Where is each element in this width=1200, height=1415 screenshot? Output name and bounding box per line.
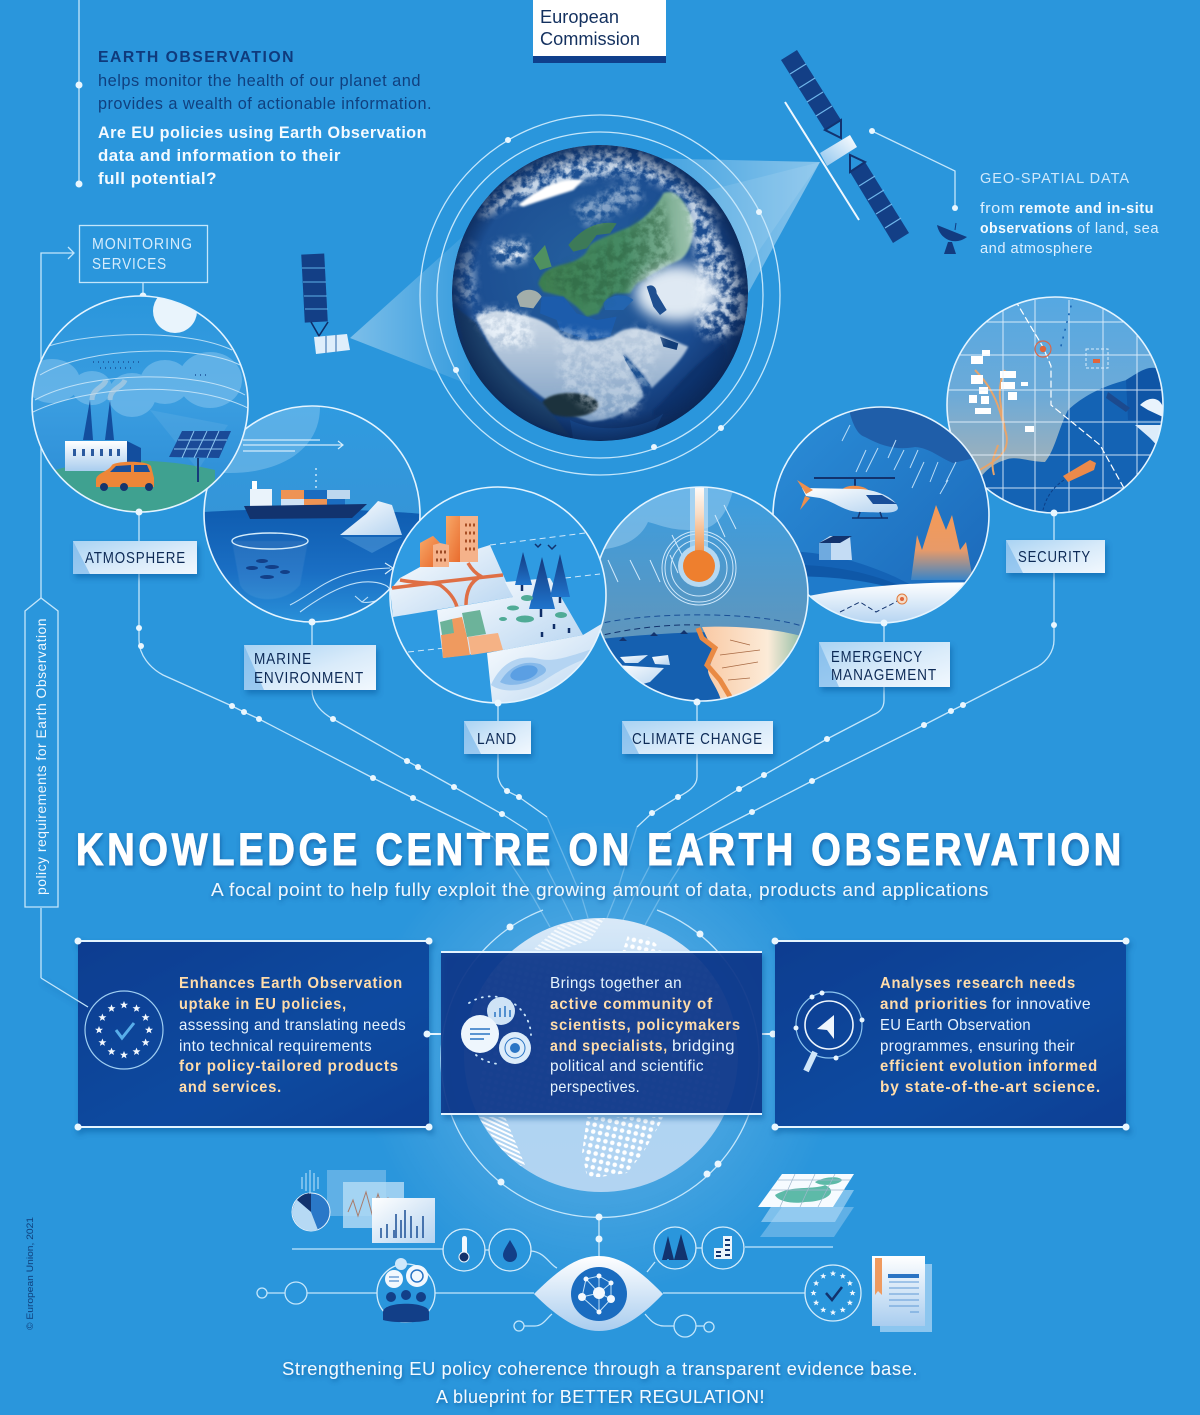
hills bbox=[800, 552, 908, 584]
label: security bbox=[1006, 540, 1105, 573]
panel: uptake in EU policies: into technical requirements bbox=[179, 1038, 372, 1055]
Indian Ocean bbox=[654, 346, 722, 412]
South Atlantic dark limb bbox=[456, 309, 556, 423]
Earth globe bbox=[452, 145, 750, 441]
satellite beam right bbox=[640, 158, 820, 317]
trees bbox=[522, 585, 569, 637]
panel: research needs: by state-of-the-art science. bbox=[880, 1079, 1101, 1096]
panel: active community: scientists, policymakers bbox=[550, 1017, 741, 1034]
icon: satellite dish bbox=[937, 223, 967, 254]
intro text block: provides a wealth of actionable information. bbox=[98, 94, 432, 113]
orange ship bbox=[1063, 460, 1096, 482]
currents bbox=[290, 568, 390, 612]
storm cloud bbox=[850, 408, 972, 463]
label: land: LAND bbox=[477, 731, 517, 748]
intro text block bbox=[76, 0, 432, 188]
bottom globe glow bbox=[360, 818, 840, 1298]
thermometer bbox=[690, 484, 708, 554]
ground bbox=[56, 460, 215, 512]
label: emergency management bbox=[819, 642, 950, 687]
tile: city bbox=[390, 545, 513, 617]
buildings bbox=[969, 350, 1034, 432]
label: land bbox=[464, 721, 531, 754]
intro text block: Are EU policies using Earth Observation bbox=[98, 123, 427, 142]
label: marine environment: MARINE bbox=[254, 651, 312, 668]
label: emergency management: MANAGEMENT bbox=[831, 667, 937, 684]
tile: fields bbox=[437, 578, 583, 658]
label: emergency management: EMERGENCY bbox=[831, 649, 923, 666]
dashed contour bbox=[408, 533, 600, 652]
European Commission logo: Commission bbox=[540, 29, 640, 49]
copyright: © European Union, 2021 bbox=[25, 1217, 35, 1330]
sea bbox=[590, 632, 760, 710]
geo-spatial data: and atmosphere bbox=[980, 240, 1093, 257]
panel: active community: bridging bbox=[672, 1038, 735, 1055]
icon: magnifier compass bbox=[794, 990, 864, 1071]
monitoring services box: MONITORING bbox=[92, 236, 193, 253]
policy requirements arrow bbox=[25, 247, 74, 978]
sea bbox=[982, 380, 1162, 512]
geo-spatial data: of land, sea bbox=[1077, 220, 1159, 237]
intro text block: helps monitor the health of our planet and bbox=[98, 71, 421, 90]
geo-spatial data: observations bbox=[980, 220, 1073, 237]
panel: research needs: EU Earth Observation bbox=[880, 1017, 1031, 1034]
European Commission logo bbox=[533, 0, 666, 63]
roads bbox=[970, 370, 1007, 475]
mountains bbox=[911, 505, 973, 580]
panel: active community: perspectives. bbox=[550, 1079, 640, 1096]
panel: uptake in EU policies: Enhances Earth Observation bbox=[179, 975, 403, 992]
bright cloud streak bbox=[518, 179, 583, 207]
Central Asia haze bbox=[635, 265, 718, 322]
pie chart bbox=[292, 1193, 330, 1231]
coast land bbox=[702, 627, 812, 715]
bottom network lines bbox=[257, 1214, 833, 1337]
intro text block: EARTH OBSERVATION bbox=[98, 49, 295, 66]
Europe and Asia landmass bbox=[538, 192, 694, 317]
label: marine environment: ENVIRONMENT bbox=[254, 670, 364, 687]
policy requirements arrow: policy requirements for Earth Observation bbox=[33, 618, 49, 895]
satellite top right bbox=[781, 50, 909, 243]
satellite left bbox=[301, 253, 350, 354]
panel: land bbox=[390, 487, 612, 710]
label: climate change bbox=[622, 721, 773, 754]
icon: thermometer bbox=[443, 1229, 485, 1271]
helicopter bbox=[797, 478, 898, 518]
tile: water bbox=[487, 623, 612, 710]
European Commission logo: European bbox=[540, 7, 619, 27]
house bbox=[819, 536, 852, 560]
solar panel bbox=[150, 410, 228, 470]
buildings bbox=[446, 516, 462, 562]
icon: EU stars check bbox=[85, 991, 163, 1069]
satellite beam left bbox=[350, 230, 470, 385]
panel: research needs: for innovative bbox=[992, 996, 1091, 1013]
icon: document bbox=[872, 1256, 932, 1332]
icon: EU stars small bbox=[805, 1265, 861, 1321]
monitoring services box bbox=[80, 226, 208, 282]
panel: active community bbox=[441, 952, 762, 1114]
box connectors bbox=[424, 1030, 776, 1038]
panel: uptake in EU policies bbox=[41, 938, 432, 1130]
factory bbox=[83, 400, 93, 440]
rain bbox=[608, 505, 736, 582]
intro text block: full potential? bbox=[98, 169, 217, 188]
label: security: SECURITY bbox=[1018, 549, 1091, 566]
panel: research needs: programmes, ensuring their bbox=[880, 1038, 1075, 1055]
panel: active community: political and scientific bbox=[550, 1058, 704, 1075]
Central Africa forest bbox=[542, 393, 598, 417]
label: atmosphere bbox=[73, 541, 197, 574]
label: atmosphere: ATMOSPHERE bbox=[85, 550, 186, 567]
subtitle: A focal point to help fully exploit the growing amount of data, products and applications bbox=[211, 880, 989, 900]
icon: trees bbox=[654, 1227, 696, 1269]
iceberg bbox=[340, 501, 402, 535]
car bbox=[96, 462, 154, 487]
intro text block: data and information to their bbox=[98, 146, 341, 165]
geo-spatial data bbox=[869, 128, 1159, 257]
label: marine environment bbox=[244, 645, 376, 690]
label: climate change: CLIMATE CHANGE bbox=[632, 731, 763, 748]
panel: uptake in EU policies: uptake in EU policies, bbox=[179, 996, 347, 1013]
panel: climate change bbox=[590, 482, 812, 715]
snowy foreground bbox=[790, 582, 995, 630]
panel: research needs: efficient evolution informed bbox=[880, 1058, 1098, 1075]
icon: buildings bbox=[702, 1227, 744, 1269]
cloud bbox=[590, 482, 735, 550]
panel: active community: and specialists, bbox=[550, 1038, 668, 1055]
monitoring services box: SERVICES bbox=[92, 256, 167, 273]
panel: active community: Brings together an bbox=[550, 975, 682, 992]
closing statement bbox=[282, 1359, 918, 1407]
panel: uptake in EU policies: assessing and translating needs bbox=[179, 1017, 406, 1034]
bottom dotted globe bbox=[441, 910, 759, 1217]
Africa and Arabia bbox=[477, 311, 688, 422]
icon: community bbox=[377, 1258, 435, 1322]
Seas bbox=[540, 297, 617, 340]
Earth orbit rings bbox=[420, 115, 780, 475]
connector lines to knowledge centre bbox=[136, 283, 1057, 927]
panel: research needs: and priorities bbox=[880, 996, 988, 1013]
panel: uptake in EU policies: for policy-tailored products bbox=[179, 1058, 399, 1075]
rain bbox=[842, 425, 956, 494]
geo-spatial data: remote and in-situ bbox=[1019, 200, 1154, 217]
panel: emergency management bbox=[772, 406, 990, 626]
grid bbox=[948, 300, 1162, 515]
dashed border bbox=[1015, 300, 1125, 490]
panel: security bbox=[946, 296, 1164, 516]
panel: active community: active community of bbox=[550, 996, 713, 1013]
panel: uptake in EU policies: and services. bbox=[179, 1079, 282, 1096]
panel: marine environment bbox=[204, 406, 422, 626]
panel: atmosphere bbox=[24, 289, 248, 520]
icon: water drop bbox=[489, 1229, 531, 1271]
wind arrow bbox=[243, 440, 343, 451]
ice floes bbox=[614, 655, 670, 688]
forest texture over land bbox=[543, 200, 673, 307]
ship bbox=[250, 489, 272, 507]
panel: research needs: Analyses research needs bbox=[880, 975, 1076, 992]
icon: map layers bbox=[758, 1174, 854, 1237]
thermometer rings bbox=[671, 540, 727, 596]
panel: research needs bbox=[772, 938, 1130, 1130]
geo-spatial data: GEO-SPATIAL DATA bbox=[980, 170, 1130, 187]
closing statement: A blueprint for BETTER REGULATION! bbox=[436, 1387, 765, 1407]
pollution specks bbox=[93, 362, 209, 375]
air layers bbox=[33, 335, 248, 412]
geo-spatial data: from bbox=[980, 200, 1015, 217]
icon: discussion bubbles bbox=[461, 996, 531, 1064]
icon: eye bbox=[534, 1256, 663, 1331]
textured clouds bbox=[453, 146, 750, 417]
fish cage bbox=[232, 533, 308, 549]
icon: charts bbox=[292, 1170, 435, 1243]
clouds bbox=[24, 352, 242, 417]
closing statement: Strengthening EU policy coherence through a transparent evidence base. bbox=[282, 1359, 918, 1379]
ice bbox=[1140, 398, 1162, 416]
